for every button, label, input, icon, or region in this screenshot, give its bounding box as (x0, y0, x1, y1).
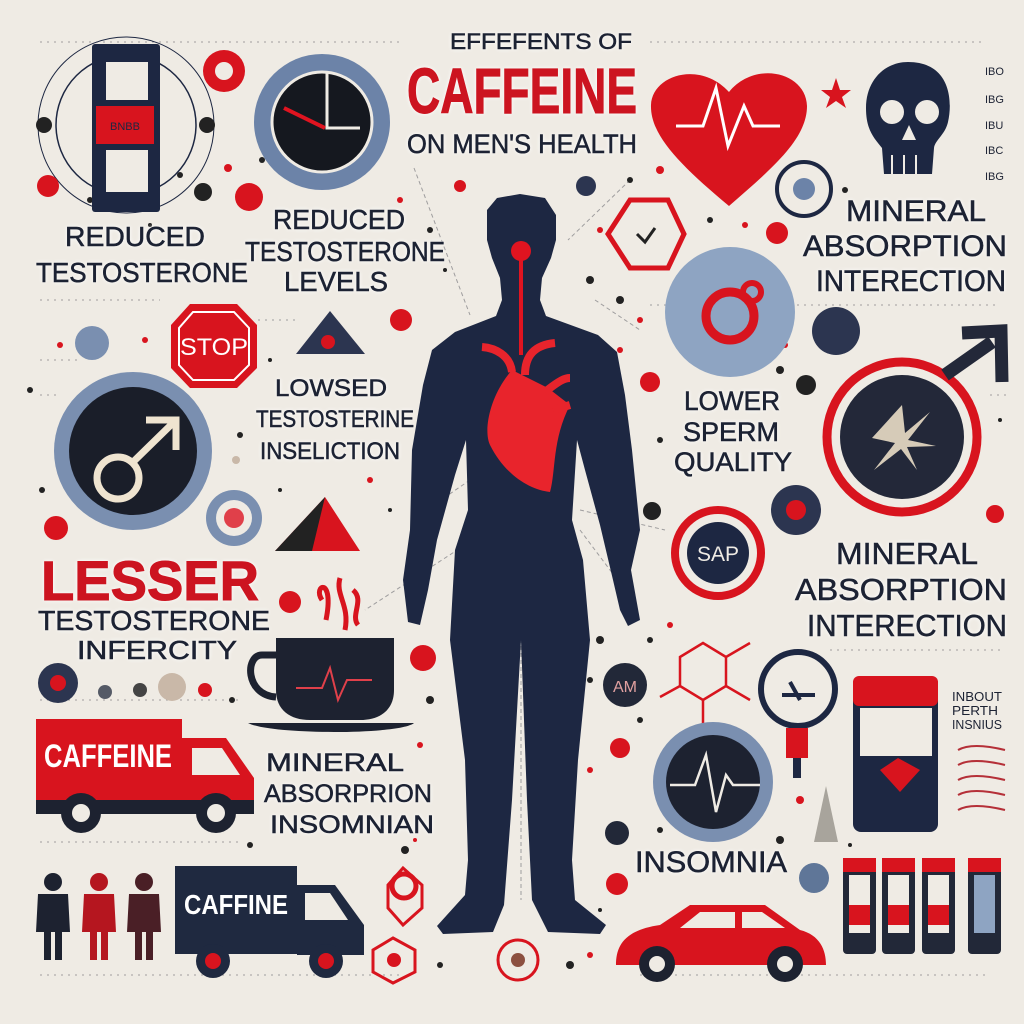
title: CAFFEINE (407, 55, 637, 127)
label: lower sperm quality (674, 386, 792, 477)
title (407, 29, 637, 159)
icon: male symbol badge (54, 372, 212, 530)
label: lesser testosterone infercity: TESTOSTERONE (38, 605, 270, 636)
label: lowsed testosterone insel: TESTOSTERINE (256, 406, 414, 433)
icon: hex molecule (660, 643, 750, 725)
icon: red car (616, 905, 826, 982)
icon: clock (254, 54, 390, 190)
icon: pulse circle (653, 722, 773, 842)
label: lower sperm quality: LOWER (684, 386, 780, 416)
label: mineral absorption middle right: MINERAL (836, 536, 978, 571)
title: ON MEN'S HEALTH (407, 129, 637, 159)
icon: gauge small (777, 162, 831, 216)
label: lesser testosterone infercity: INFERCITY (77, 635, 237, 665)
icon: caffeine red truck: CAFFEINE (44, 738, 172, 774)
label: lower sperm quality: QUALITY (674, 447, 792, 477)
icon: SAP ring (675, 510, 761, 596)
icon: caffeine red truck (36, 719, 254, 833)
icon: red dark mound (296, 311, 365, 354)
label: mineral absorption middle right: INTERECTION (807, 608, 1007, 643)
legend list top right: IBU (985, 120, 1003, 132)
text notes right (952, 689, 1005, 810)
label: mineral absorption insomnian: INSOMNIAN (270, 811, 434, 839)
icon: four vials (843, 858, 1001, 954)
label: reduced testosterone left: REDUCED (65, 221, 205, 252)
icon: caffine dark truck: CAFFINE (184, 889, 288, 920)
legend list top right: IBO (985, 66, 1004, 78)
icon: small dark badge (771, 485, 821, 535)
text notes right: INBOUT (952, 689, 1002, 704)
icon: caffine dark truck (175, 866, 364, 978)
red artery line (511, 241, 531, 355)
icon: heart with pulse (651, 73, 807, 206)
icon: red badge top (203, 50, 245, 92)
icon: small ring lens (206, 490, 262, 546)
icon: hexagon badges bottom (373, 868, 538, 983)
legend list top right: IBG (985, 171, 1004, 183)
icon: hexagon warning (608, 200, 684, 268)
label: mineral absorption middle right (795, 536, 1007, 643)
label: mineral absorption top right: ABSORPTION (803, 230, 1007, 263)
label: lower sperm quality: SPERM (683, 417, 779, 447)
icon: caffeine canister (36, 37, 215, 213)
label: mineral absorption top right: MINERAL (846, 195, 986, 228)
human body silhouette (403, 194, 640, 934)
icon: caffeine canister: BNBB (110, 121, 140, 133)
label: mineral absorption top right: INTERECTION (816, 265, 1006, 298)
icon: red canister (853, 676, 938, 832)
label: reduced testosterone levels (245, 204, 445, 297)
icon: dark circle AM: AM (613, 679, 637, 696)
icon: stop sign (171, 304, 257, 388)
label: reduced testosterone levels: LEVELS (284, 266, 388, 297)
legend list top right (985, 66, 1004, 183)
icon: SAP ring: SAP (697, 543, 739, 566)
icon: red star (821, 78, 851, 108)
label: lowsed testosterone insel: INSELICTION (260, 438, 400, 465)
label: lesser testosterone infercity (38, 549, 270, 665)
text notes right: INSNIUS (952, 717, 1002, 732)
title: EFFEFENTS OF (450, 29, 632, 54)
icon: ring circle (665, 247, 795, 377)
icon: male ring top right (827, 331, 1002, 512)
label: lowsed testosterone insel: LOWSED (275, 375, 387, 402)
heart anatomy (482, 343, 570, 492)
label: mineral absorption middle right: ABSORPTION (795, 572, 1007, 607)
icon: skull (866, 62, 950, 174)
icon: three people (36, 873, 161, 960)
legend list top right: IBC (985, 145, 1003, 157)
scattered decorative dots (37, 175, 1004, 895)
label: reduced testosterone levels: REDUCED (273, 204, 405, 235)
icon: red triangle (275, 497, 360, 551)
label: mineral absorption insomnian (264, 749, 434, 839)
label: mineral absorption insomnian: ABSORPRION (264, 780, 432, 808)
icon: stop sign: STOP (180, 334, 248, 361)
label: insomnia: INSOMNIA (635, 846, 787, 879)
label: lowsed testosterone insel (256, 375, 414, 465)
icon: dark circle AM (603, 663, 647, 707)
text notes right: PERTH (952, 703, 998, 718)
label: reduced testosterone levels: TESTOSTERONE (245, 236, 445, 267)
label: reduced testosterone left: TESTOSTERONE (36, 257, 248, 288)
icon: coffee cup (248, 578, 414, 732)
icon: magnifier (761, 652, 835, 778)
label: mineral absorption top right (803, 195, 1007, 298)
label: reduced testosterone left (36, 221, 248, 288)
label: mineral absorption insomnian: MINERAL (266, 749, 404, 777)
label: lesser testosterone infercity: LESSER (41, 549, 259, 612)
legend list top right: IBG (985, 94, 1004, 106)
